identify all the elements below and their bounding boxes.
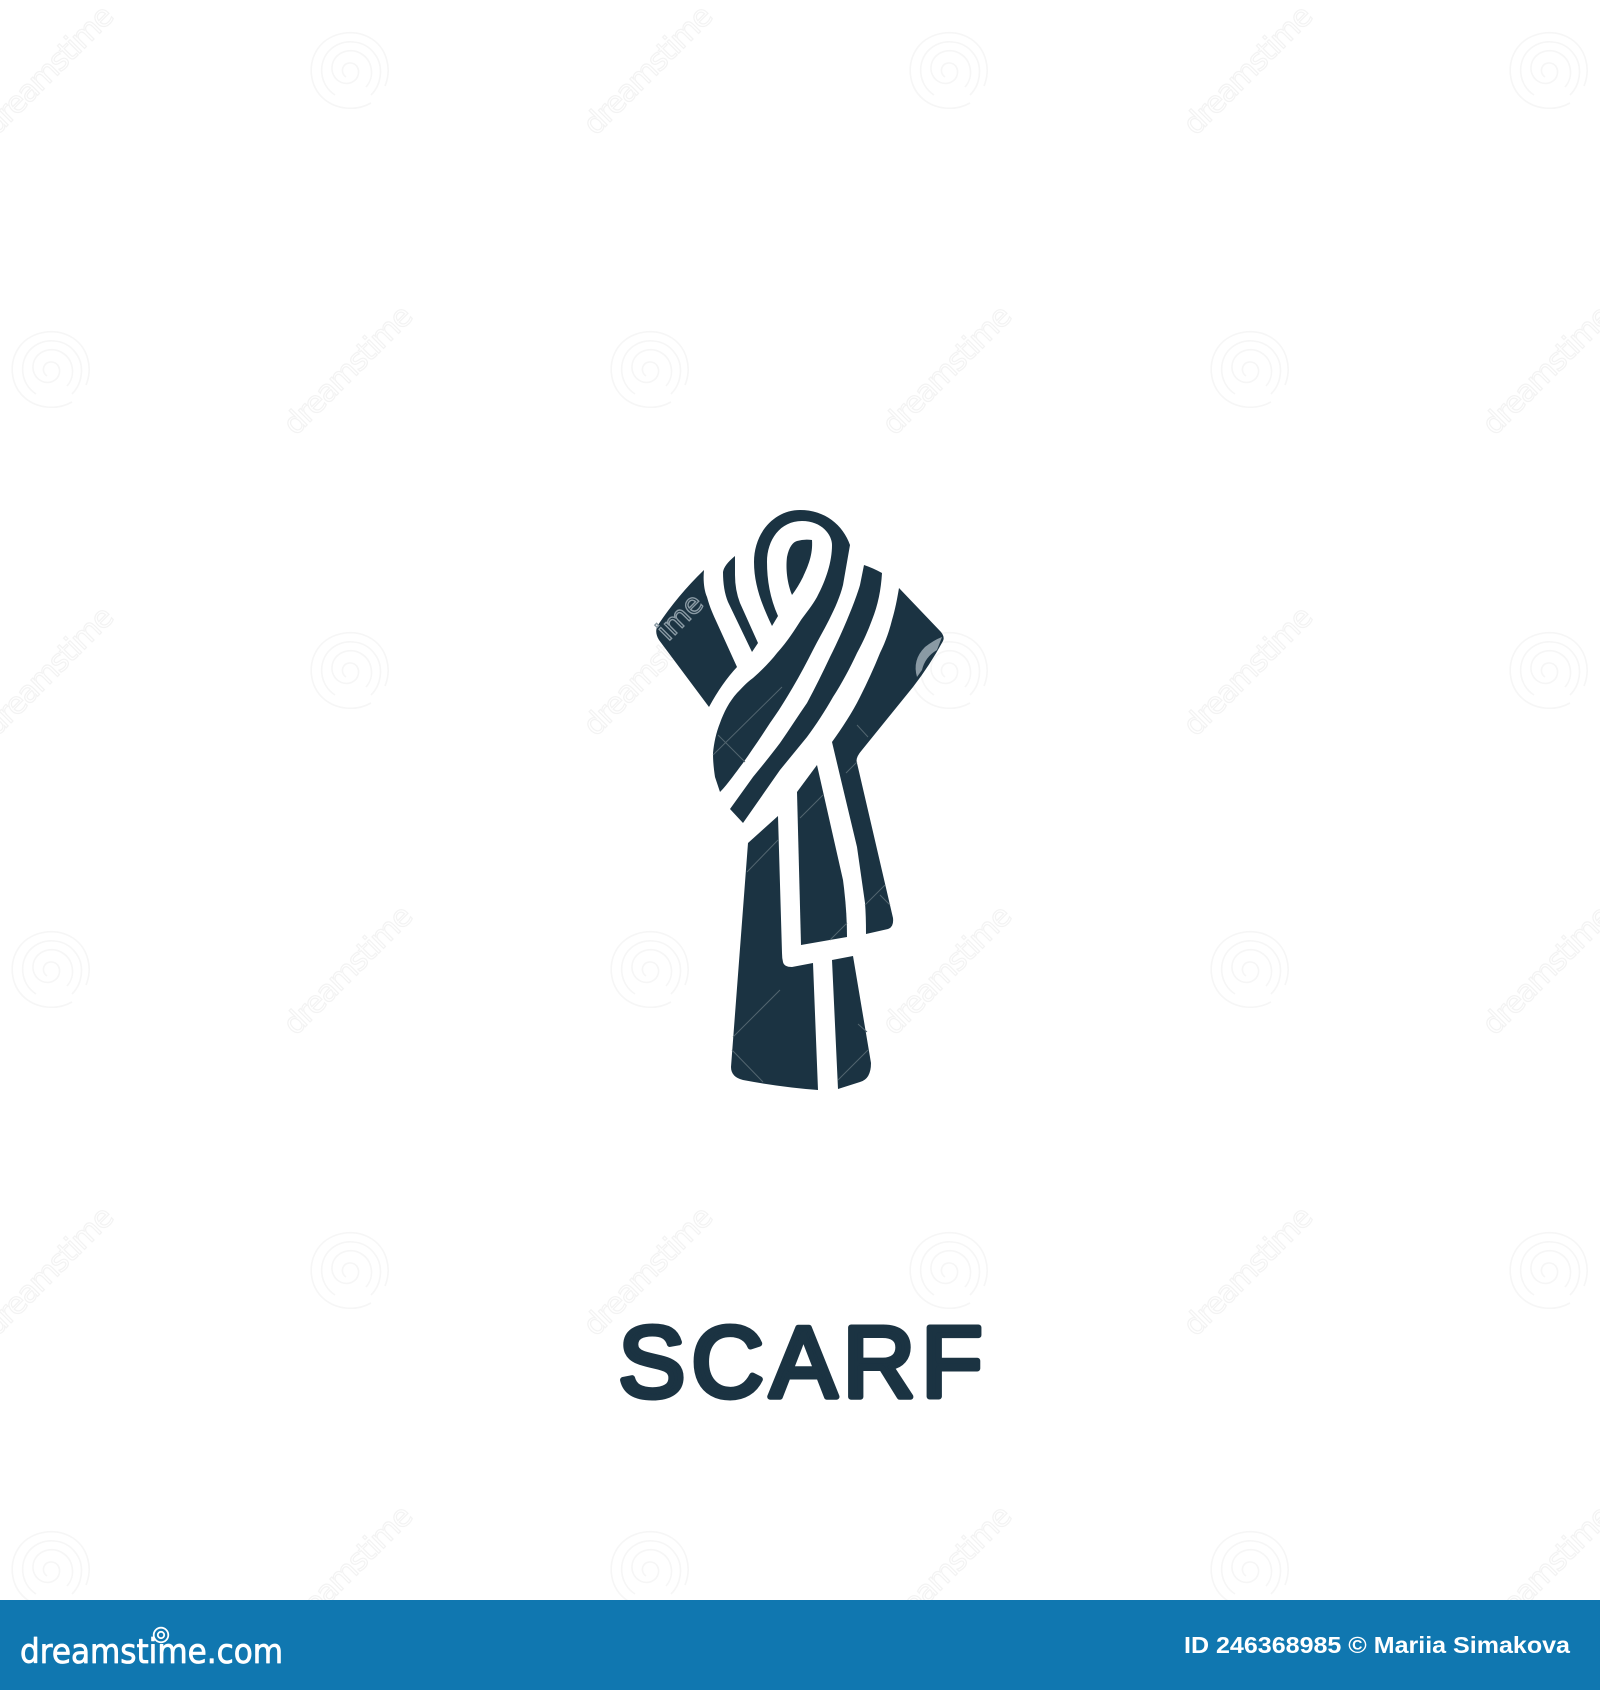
- narrow back strip: [723, 556, 758, 652]
- watermark: dreamstime text: dreamstime: [577, 1200, 720, 1343]
- overlay: thin lines: [713, 687, 890, 1082]
- watermark: dreamstime text: dreamstime: [876, 299, 1019, 442]
- left neck wedge: [656, 570, 737, 707]
- short right tail: [832, 956, 871, 1089]
- watermark: dreamstime text: dreamstime: [277, 299, 420, 442]
- icon: scarf: [656, 510, 944, 1090]
- title: SCARF: [618, 1306, 982, 1418]
- overlay: right wedge spiral arc: [916, 637, 942, 677]
- footer logo: dreamstime.com: [20, 1632, 283, 1672]
- knot loop: [713, 510, 850, 792]
- watermark: dreamstime text: dreamstime: [876, 1499, 1019, 1642]
- loop eye: [787, 540, 812, 595]
- watermark: dreamstime text: dreamstime: [277, 899, 420, 1042]
- watermark: dreamstime text: dreamstime: [277, 1499, 420, 1642]
- watermark: dreamstime text: dreamstime: [1177, 1200, 1320, 1343]
- watermark: dreamstime text: dreamstime: [1177, 600, 1320, 743]
- footer bar: [0, 1600, 1600, 1690]
- watermark: dreamstime text: dreamstime: [876, 899, 1019, 1042]
- watermark: dreamstime text: dreamstime: [577, 0, 720, 142]
- diagonal wrap stripe: [730, 565, 882, 823]
- watermark: dreamstime text: dreamstime: [1177, 0, 1320, 142]
- long left tail: [731, 816, 818, 1090]
- watermark overlay on icon: [650, 587, 942, 1082]
- watermark: dreamstime text: dreamstime: [577, 600, 720, 743]
- middle hanging panel: [797, 765, 847, 945]
- overlay: left wedge text: ime: [650, 587, 710, 647]
- footer credit: ID 246368985 © Mariia Simakova: [1184, 1632, 1571, 1658]
- right neck wedge and hanging strip: [832, 588, 944, 934]
- icon: logo spiral: [154, 1628, 168, 1642]
